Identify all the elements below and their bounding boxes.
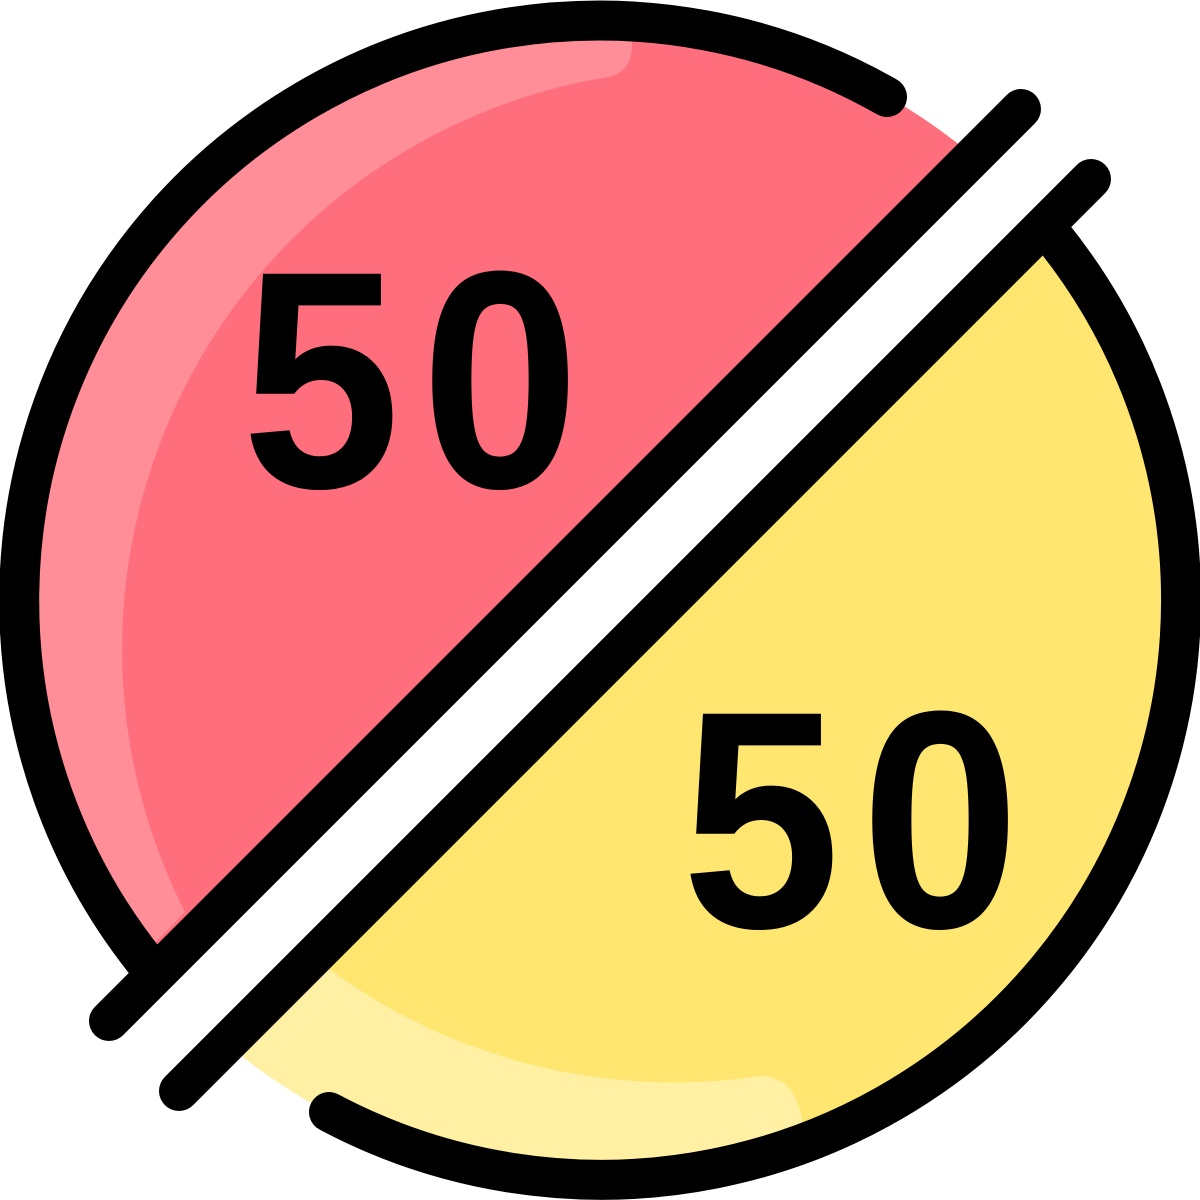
divider line: lower: [179, 179, 1091, 1091]
label: 50 on red half: 50: [242, 207, 580, 554]
circle outline: lower right arc: [329, 235, 1181, 1180]
circle outline: upper left arc: [19, 21, 887, 965]
panel: yellow half: [242, 256, 1162, 1160]
divider line: upper: [109, 109, 1021, 1021]
panel: red half: [39, 40, 958, 944]
label: 50 on yellow half: 50: [682, 647, 1020, 994]
